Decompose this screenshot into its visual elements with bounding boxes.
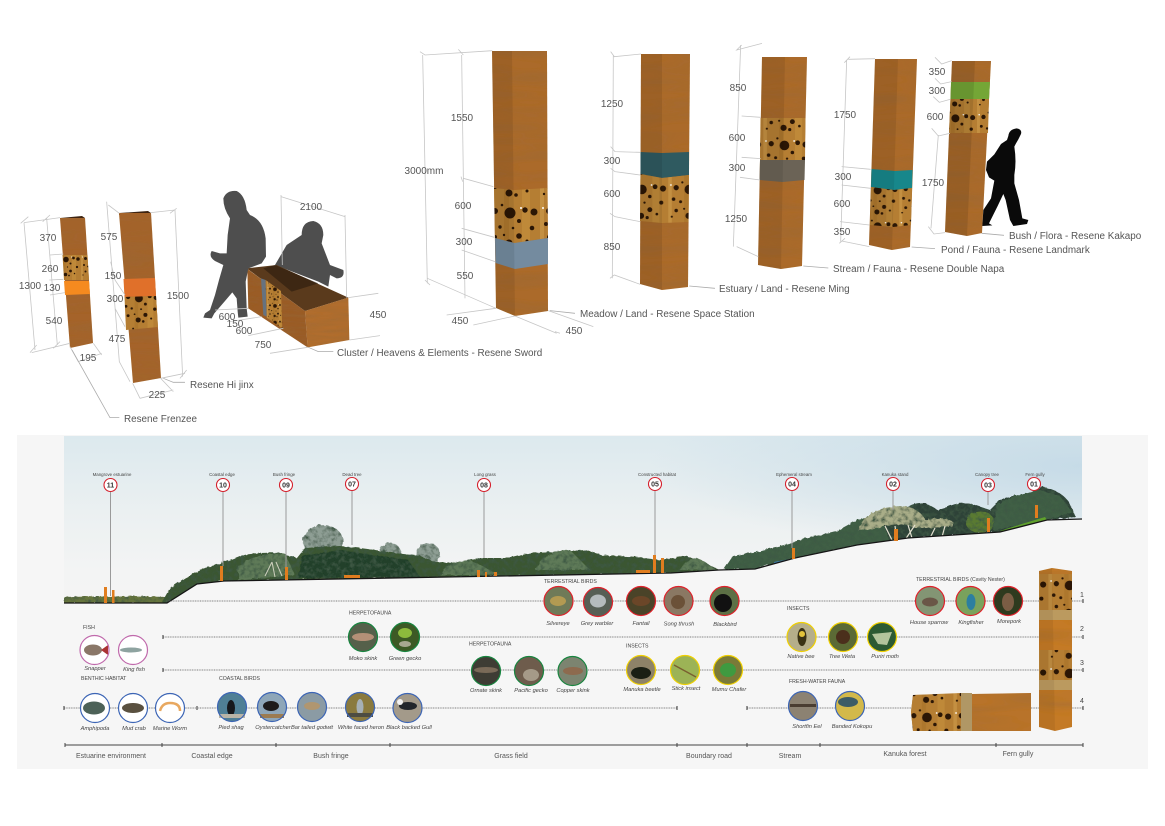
label: Stream / Fauna: Stream / Fauna - Resene Double Napa (833, 264, 1005, 275)
landscape: green canopy tree (966, 511, 994, 533)
species: Mud crab: Mud crab (122, 726, 146, 732)
species: Moko skink (348, 622, 378, 662)
species: Snapper: Snapper (84, 666, 107, 672)
species: Mud crab (118, 694, 148, 732)
label: Resene Frenzee: Resene Frenzee (124, 414, 198, 425)
callout 10 (209, 472, 235, 492)
species: Banded Kokopu (832, 692, 873, 730)
label: Pond / Fauna: Pond / Fauna - Resene Landmark (941, 245, 1090, 256)
dimension labels: small posts: 260 (42, 264, 59, 275)
dimension labels: Stream post: 600 (729, 133, 746, 144)
dimensions: Stream post (733, 43, 828, 268)
headings: COASTAL BIRDS (219, 676, 260, 682)
headings: HERPETOFAUNA (469, 642, 512, 648)
species: Manuka beetle (623, 656, 661, 693)
zone labels: Boundary road (686, 753, 732, 760)
species: Fantail: Fantail (632, 621, 650, 627)
silhouette: seated person behind (275, 221, 344, 287)
species: Mumu Chafer: Mumu Chafer (712, 687, 747, 693)
orange habitat posts in landscape (104, 505, 1038, 603)
dimension labels: Pond post (834, 110, 857, 238)
species: Manuka beetle: Manuka beetle (623, 687, 661, 693)
dimension labels: small posts: 300 (107, 294, 124, 305)
dimensions: Estuary post (610, 52, 715, 288)
species: Marine Worm (153, 694, 187, 732)
callout 08: 08 (480, 482, 488, 490)
dimension labels: Stream post (725, 83, 748, 225)
landscape: lighter hill, left (237, 550, 716, 580)
dimension labels: small posts: 540 (46, 316, 63, 327)
dimension labels: small posts: 130 (44, 283, 61, 294)
callout 07: Dead tree (342, 472, 362, 477)
species: White faced heron: White faced heron (338, 725, 384, 731)
callouts with numbered markers (93, 472, 1045, 596)
zone axis (65, 743, 1083, 760)
species: Green gecko (389, 622, 421, 662)
landscape: kanuka trunks (885, 525, 945, 542)
landscape: marsh vegetation (64, 596, 167, 603)
species: Copper skink: Copper skink (556, 688, 591, 694)
species: Song thrush: Song thrush (664, 622, 694, 628)
landscape: forest, left (162, 546, 719, 603)
callout 07: 07 (348, 482, 356, 488)
species: Kingfisher: Kingfisher (958, 620, 985, 626)
dimension labels: Pond post: 300 (835, 172, 852, 183)
landscape: sky (64, 436, 1082, 604)
dimension labels: Bush post: 300 (929, 86, 946, 97)
dimension labels: Stream post: 300 (729, 163, 746, 174)
dimension labels: small posts: 370 (40, 233, 57, 244)
line numbers: 2 (1080, 626, 1084, 633)
callout 03: 03 (984, 482, 992, 490)
zone labels: Stream (779, 753, 801, 760)
post: Pond / Fauna (869, 59, 917, 250)
species: Bar tailed godwit (291, 692, 333, 731)
zone labels: Kanuka forest (883, 751, 927, 758)
dimensions: Pond post (839, 57, 935, 249)
zone labels: Grass field (494, 753, 528, 760)
species: Tree Weta (828, 622, 858, 660)
dimensions: small posts (21, 202, 187, 418)
dimension labels: Meadow post: 3000mm (405, 166, 443, 177)
dimension labels: Meadow post: 450 (452, 316, 469, 327)
callout 01 (1025, 472, 1045, 490)
species: Stick insect: Stick insect (672, 686, 701, 692)
species: Blackbird (710, 586, 739, 628)
species: Fantail (626, 586, 656, 627)
callout 11: 11 (107, 482, 114, 490)
dimension labels: Bush post (922, 67, 946, 189)
dimension labels: Meadow post: 600 (455, 201, 472, 212)
landscape: ground surface (64, 519, 1082, 606)
bench cluster with seated figures (203, 191, 380, 353)
zone labels: Coastal edge (191, 753, 233, 760)
dimension labels: Estuary post: 600 (604, 189, 621, 200)
dimension labels: bench: 150 (227, 319, 244, 330)
landscape: ground line (64, 519, 1082, 603)
callout 09: 09 (282, 482, 290, 490)
species: Shortfin Eel: Shortfin Eel (792, 724, 822, 730)
dimension labels: Meadow post: 1550 (451, 113, 474, 124)
small post: Resene Frenzee (60, 216, 93, 348)
dimension labels: small posts (19, 232, 190, 401)
dimension labels: Meadow post: 450 (566, 326, 583, 337)
landscape: kanuka stand (858, 506, 953, 530)
landscape: fern bank (1000, 517, 1047, 534)
callout 04: 04 (788, 482, 796, 488)
species: Snapper (80, 636, 109, 672)
headings: INSECTS (626, 644, 649, 650)
landscape: pale tree trunks (265, 562, 282, 577)
headings: INSECTS (787, 606, 810, 612)
species: Silvereye: Silvereye (546, 621, 570, 627)
bench body (247, 265, 349, 347)
label: Cluster / Heavens & Elements: Cluster / Heavens & Elements - Resene Sword (337, 348, 542, 359)
callout 09 (273, 472, 296, 492)
zone labels: Estuarine environment (76, 753, 146, 760)
species: Pacific gecko (514, 656, 548, 694)
dimension labels: small posts: 195 (80, 353, 97, 364)
species: Mumu Chafer (712, 656, 747, 693)
species: Native bee (787, 622, 816, 660)
callout 08 (474, 472, 497, 492)
panel: habitat section (17, 435, 1148, 769)
medium post: Resene Hi jinx (119, 211, 161, 383)
large bee post, horizontal (911, 693, 1031, 731)
callout 05 (638, 472, 677, 490)
species: Pied shag: Pied shag (218, 725, 244, 731)
dimension labels: Bush post: 1750 (922, 178, 945, 189)
dimension labels: Pond post: 350 (834, 227, 851, 238)
species: Blackbird: Blackbird (713, 622, 738, 628)
callout 02 (882, 472, 909, 490)
dimension labels: small posts: 1300 (19, 281, 42, 292)
large bee post, vertical (1039, 568, 1072, 731)
zone labels: Bush fringe (313, 753, 349, 760)
post: Stream / Fauna (758, 57, 807, 269)
callout 02: 02 (889, 482, 897, 488)
dimension labels: bench: 450 (370, 310, 387, 321)
species: Stick insect (670, 656, 701, 692)
callout 05: Constructed habitat (638, 472, 677, 477)
dimension labels: small posts: 575 (101, 232, 118, 243)
dimension labels: Pond post: 1750 (834, 110, 857, 121)
dimension labels: Pond post: 600 (834, 199, 851, 210)
species: Amphipoda (80, 694, 110, 732)
callout 04 (776, 472, 812, 490)
dimensions: Bush post (928, 57, 1004, 235)
line numbers: 1 (1080, 592, 1084, 599)
dotted habitat lines (64, 601, 1083, 708)
callout 11: Mangrove estuarine (93, 472, 132, 477)
species: Amphipoda: Amphipoda (80, 726, 109, 732)
species: White faced heron (338, 692, 384, 731)
zone labels: Fern gully (1003, 751, 1034, 758)
species: King fish: King fish (123, 667, 145, 673)
headings: FRESH-WATER FAUNA (789, 679, 846, 685)
dimensions: Meadow post (420, 49, 593, 333)
dimension labels: small posts: 1500 (167, 291, 190, 302)
dimension labels: Estuary post: 850 (604, 242, 621, 253)
species: Puriri moth (868, 622, 899, 660)
callout 11 (93, 472, 132, 492)
species: Black backed Gull: Black backed Gull (386, 725, 432, 731)
dimension labels: Bush post: 350 (929, 67, 946, 78)
species: Morepork: Morepork (997, 619, 1022, 625)
species: Moko skink: Moko skink (349, 656, 378, 662)
label: Meadow / Land: Meadow / Land - Resene Space Station (580, 309, 755, 320)
line tick marks (64, 599, 1083, 710)
species: Copper skink (556, 656, 591, 694)
dimension labels: small posts: 475 (109, 334, 126, 345)
callout 02: Kanuka stand (882, 472, 909, 477)
species: Shortfin Eel (788, 692, 822, 730)
callout 07 (342, 472, 362, 490)
callout 03: Canopy tree (975, 472, 1000, 477)
line numbers: 3 (1080, 660, 1084, 667)
dimension labels: bench (219, 202, 387, 351)
landscape: pale background trees, left (303, 525, 440, 565)
dimension labels: Estuary post: 300 (604, 156, 621, 167)
label: Estuary / Land: Estuary / Land - Resene Ming (719, 284, 850, 295)
species: Grey warbler: Grey warbler (581, 621, 614, 627)
dimension labels: Meadow post (405, 113, 583, 337)
species: Oystercatcher (255, 692, 292, 731)
dimension labels: Estuary post: 1250 (601, 99, 624, 110)
species: Oystercatcher: Oystercatcher (255, 725, 292, 731)
species: Native bee: Native bee (787, 654, 815, 660)
dimension labels: Meadow post: 550 (457, 271, 474, 282)
species: Puriri moth: Puriri moth (871, 654, 899, 660)
headings: TERRESTRIAL BIRDS (Cavity Nester) (916, 577, 1005, 583)
species: Marine Worm: Marine Worm (153, 726, 187, 732)
dimension labels: bench: 2100 (300, 202, 323, 213)
headings: HERPETOFAUNA (349, 610, 392, 616)
headings: FISH (83, 625, 95, 631)
callout 01: Fern gully (1025, 472, 1045, 477)
label: Bush / Flora: Bush / Flora - Resene Kakapo (1009, 231, 1142, 242)
bench dimension lines (215, 195, 380, 353)
dimension labels: Stream post: 1250 (725, 214, 748, 225)
dimension labels: Stream post: 850 (730, 83, 747, 94)
dimension labels: small posts: 225 (149, 390, 166, 401)
dimension labels: Estuary post (601, 99, 624, 253)
landscape: dark hill behind kanuka (850, 487, 1076, 545)
headings (81, 577, 1005, 685)
callout 03 (975, 472, 1000, 492)
landscape: stream (774, 559, 790, 564)
landscape: darker forest core (298, 550, 420, 578)
silhouette: seated person front (203, 191, 266, 318)
callout 04: Ephemeral stream (776, 472, 812, 477)
dimension labels: small posts: 150 (105, 271, 122, 282)
species: Silvereye (544, 586, 573, 627)
dimension labels: bench: 750 (255, 340, 272, 351)
line numbers: 4 (1080, 698, 1084, 705)
species: Song thrush (664, 586, 694, 628)
species: Ornate skink: Ornate skink (470, 688, 503, 694)
species: Bar tailed godwit: Bar tailed godwit (291, 725, 333, 731)
callout 01: 01 (1030, 482, 1038, 488)
species: Black backed Gull (386, 694, 432, 731)
species: Green gecko: Green gecko (389, 656, 421, 662)
post: Bush / Flora (945, 61, 991, 236)
species: Grey warbler (581, 588, 614, 627)
species: Ornate skink (470, 656, 503, 694)
species: Banded Kokopu: Banded Kokopu (832, 724, 873, 730)
dimension labels: Meadow post: 300 (456, 237, 473, 248)
species: Tree Weta: Tree Weta (829, 654, 855, 660)
dimension labels: bench: 600 (236, 326, 253, 337)
species: King fish (118, 636, 148, 673)
species: House sparrow: House sparrow (910, 620, 949, 626)
zone labels (76, 751, 1034, 760)
species: Kingfisher (956, 586, 985, 626)
dimension labels: Bush post: 600 (927, 112, 944, 123)
callout 10: Coastal edge (209, 472, 235, 477)
silhouette: walking person (982, 128, 1028, 226)
species: Morepork (994, 586, 1022, 625)
species: House sparrow (910, 586, 949, 626)
callout 09: Bush fringe (273, 472, 296, 477)
post: Estuary / Land (640, 54, 690, 290)
line numbers (1080, 592, 1084, 705)
headings: BENTHIC HABITAT (81, 676, 127, 682)
callout 05: 05 (651, 482, 659, 488)
label: Resene Hi jinx: Resene Hi jinx (190, 380, 254, 391)
landscape: forest, right (724, 490, 1072, 569)
callout 08: Long grass (474, 472, 497, 477)
headings: TERRESTRIAL BIRDS (544, 579, 597, 585)
callout 10: 10 (219, 482, 227, 490)
species: Pied shag (218, 692, 246, 731)
dimension labels: bench: 600 (219, 312, 236, 323)
species: Pacific gecko: Pacific gecko (514, 688, 548, 694)
post: Meadow / Land (492, 51, 548, 316)
